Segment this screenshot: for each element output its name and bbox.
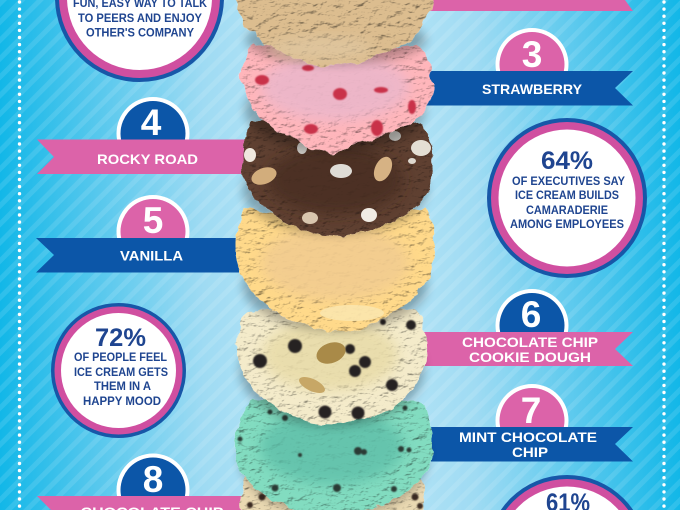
cookie dough chunk (313, 338, 349, 368)
stat circle: 72%: THEM IN A (94, 381, 151, 393)
flavor 6: chocolate chip cookie dough (400, 289, 633, 366)
flavor 4: rocky road: ROCKY ROAD (97, 151, 198, 167)
flavor 6: chocolate chip cookie dough: 6 (521, 294, 541, 335)
stat circle: talk to peers: TO PEERS AND ENJOY (78, 13, 202, 25)
dotted border left (18, 2, 21, 510)
stat circle: 64%: AMONG EMPLOYEES (510, 219, 624, 231)
stat circle: talk to peers: OTHER'S COMPANY (86, 28, 194, 40)
scoop: mint chocolate chip (235, 399, 433, 510)
stat circle: 64%: ICE CREAM BUILDS (515, 190, 619, 202)
scoop: vanilla (236, 206, 435, 332)
stat circle: 72%: ICE CREAM GETS (74, 367, 168, 379)
stat circle: 72%: OF PEOPLE FEEL (74, 352, 167, 364)
flavor 4: rocky road (37, 97, 270, 174)
scoop: strawberry (242, 42, 433, 153)
flavor 7: mint chocolate chip: MINT CHOCOLATE (459, 429, 597, 445)
scoop: cookies and cream bottom (240, 472, 424, 510)
stat circle: 64%: OF EXECUTIVES SAY (512, 176, 625, 188)
flavor 5: vanilla: 5 (143, 200, 163, 241)
ice cream scoop stack (235, 0, 435, 510)
marshmallows and almonds (244, 131, 431, 224)
flavor 3: strawberry: STRAWBERRY (482, 81, 583, 97)
scoop: chocolate chip cookie dough (236, 309, 427, 426)
stat circle: 64% (487, 118, 647, 278)
flavor 7: mint chocolate chip: 7 (521, 390, 541, 431)
flavor 8: chocolate chip (37, 454, 270, 510)
stat circle: 72%: 72% (95, 324, 146, 352)
dotted border right (662, 2, 666, 510)
scoop: rocky road (242, 118, 433, 236)
flavor 7: mint chocolate chip: CHIP (512, 444, 548, 460)
stat circle: 61% (487, 475, 647, 510)
stat circle: 64%: 64% (541, 147, 593, 175)
flavor 4: rocky road: 4 (141, 102, 162, 143)
stat circle: 64%: CAMARADERIE (526, 205, 608, 217)
flavor 6: chocolate chip cookie dough: COOKIE DOUGH (469, 349, 591, 365)
flavor 6: chocolate chip cookie dough: CHOCOLATE CHIP (462, 334, 598, 350)
flavor 5: vanilla (36, 195, 270, 272)
flavor 3: strawberry (400, 28, 633, 106)
stat circle: 72%: HAPPY MOOD (83, 396, 161, 408)
flavor 8: chocolate chip: 8 (143, 459, 163, 500)
flavor 3: strawberry: 3 (522, 34, 542, 75)
stat circle: talk to peers (55, 0, 224, 82)
scoop: coffee (235, 0, 434, 66)
flavor 7: mint chocolate chip (400, 384, 633, 462)
flavor 2 ribbon (400, 0, 640, 11)
stat circle: 72% (51, 303, 186, 438)
flavor 5: vanilla: VANILLA (120, 248, 183, 264)
